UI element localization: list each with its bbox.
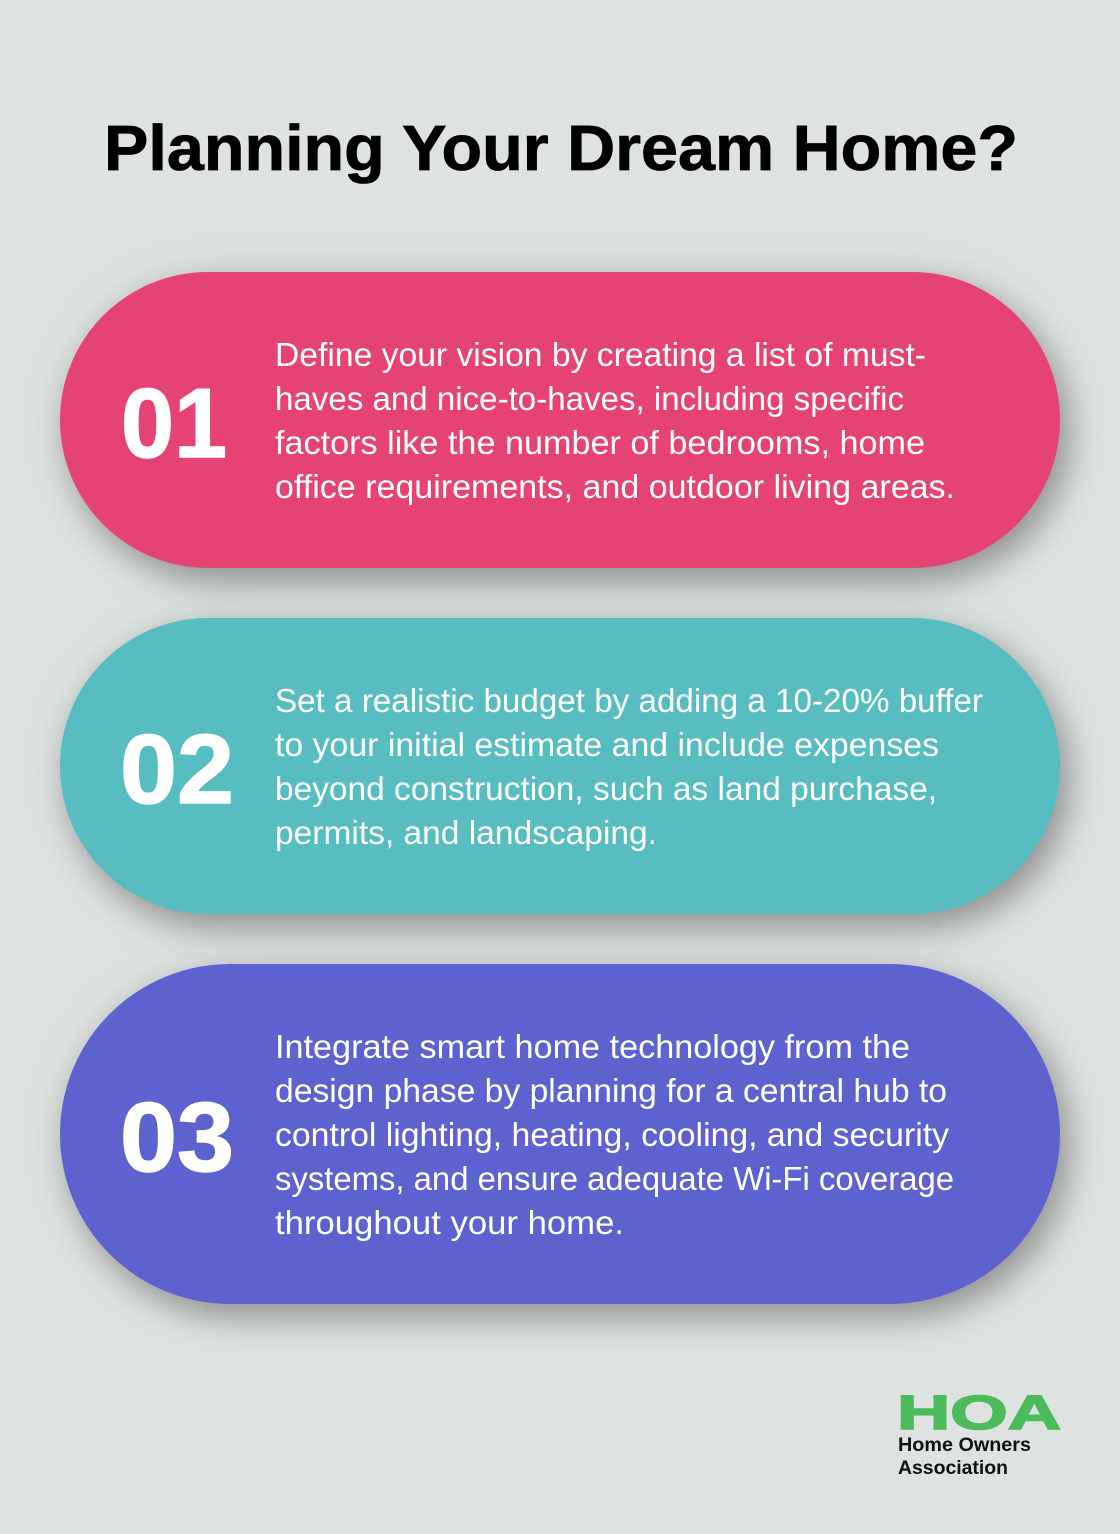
title: Planning Your Dream Home?	[104, 112, 1018, 184]
logo caption: Association	[898, 1458, 1008, 1479]
text block: step 02: beyond construction, such as land purchase,	[275, 770, 937, 807]
text block: step 01: factors like the number of bedrooms, home	[275, 424, 925, 461]
text block: step 02	[275, 682, 983, 851]
text block: step 01: haves and nice-to-haves, including specific	[275, 380, 904, 417]
text block: step 03	[275, 1028, 954, 1241]
pill background: step 01	[60, 272, 1060, 568]
panel: step 01	[60, 272, 1060, 568]
panel: step 02	[60, 618, 1060, 914]
number 02: 02	[120, 714, 234, 824]
logo wordmark: HOA	[897, 1387, 1061, 1440]
text block: step 03: design phase by planning for a central hub to	[275, 1072, 947, 1109]
text block: step 03: control lighting, heating, cooling, and security	[275, 1116, 949, 1153]
pill background: step 03	[60, 964, 1060, 1304]
logo caption	[898, 1435, 1031, 1479]
text block: step 03: throughout your home.	[275, 1204, 624, 1241]
text block: step 01	[275, 336, 955, 505]
panel: step 03	[60, 964, 1060, 1304]
number 03: 03	[120, 1082, 234, 1192]
text block: step 03: Integrate smart home technology from the	[275, 1028, 910, 1065]
number 01: 01	[121, 368, 227, 478]
logo caption: Home Owners	[898, 1435, 1031, 1456]
text block: step 02: Set a realistic budget by adding a 10-20% buffer	[275, 682, 983, 719]
pill background: step 02	[60, 618, 1060, 914]
text block: step 03: systems, and ensure adequate Wi-Fi coverage	[275, 1160, 954, 1197]
text block: step 01: Define your vision by creating a list of must-	[275, 336, 926, 373]
text block: step 02: permits, and landscaping.	[275, 814, 657, 851]
text block: step 01: office requirements, and outdoor living areas.	[275, 468, 955, 505]
logo: HOA Home Owners Association	[897, 1387, 1061, 1479]
text block: step 02: to your initial estimate and include expenses	[275, 726, 939, 763]
